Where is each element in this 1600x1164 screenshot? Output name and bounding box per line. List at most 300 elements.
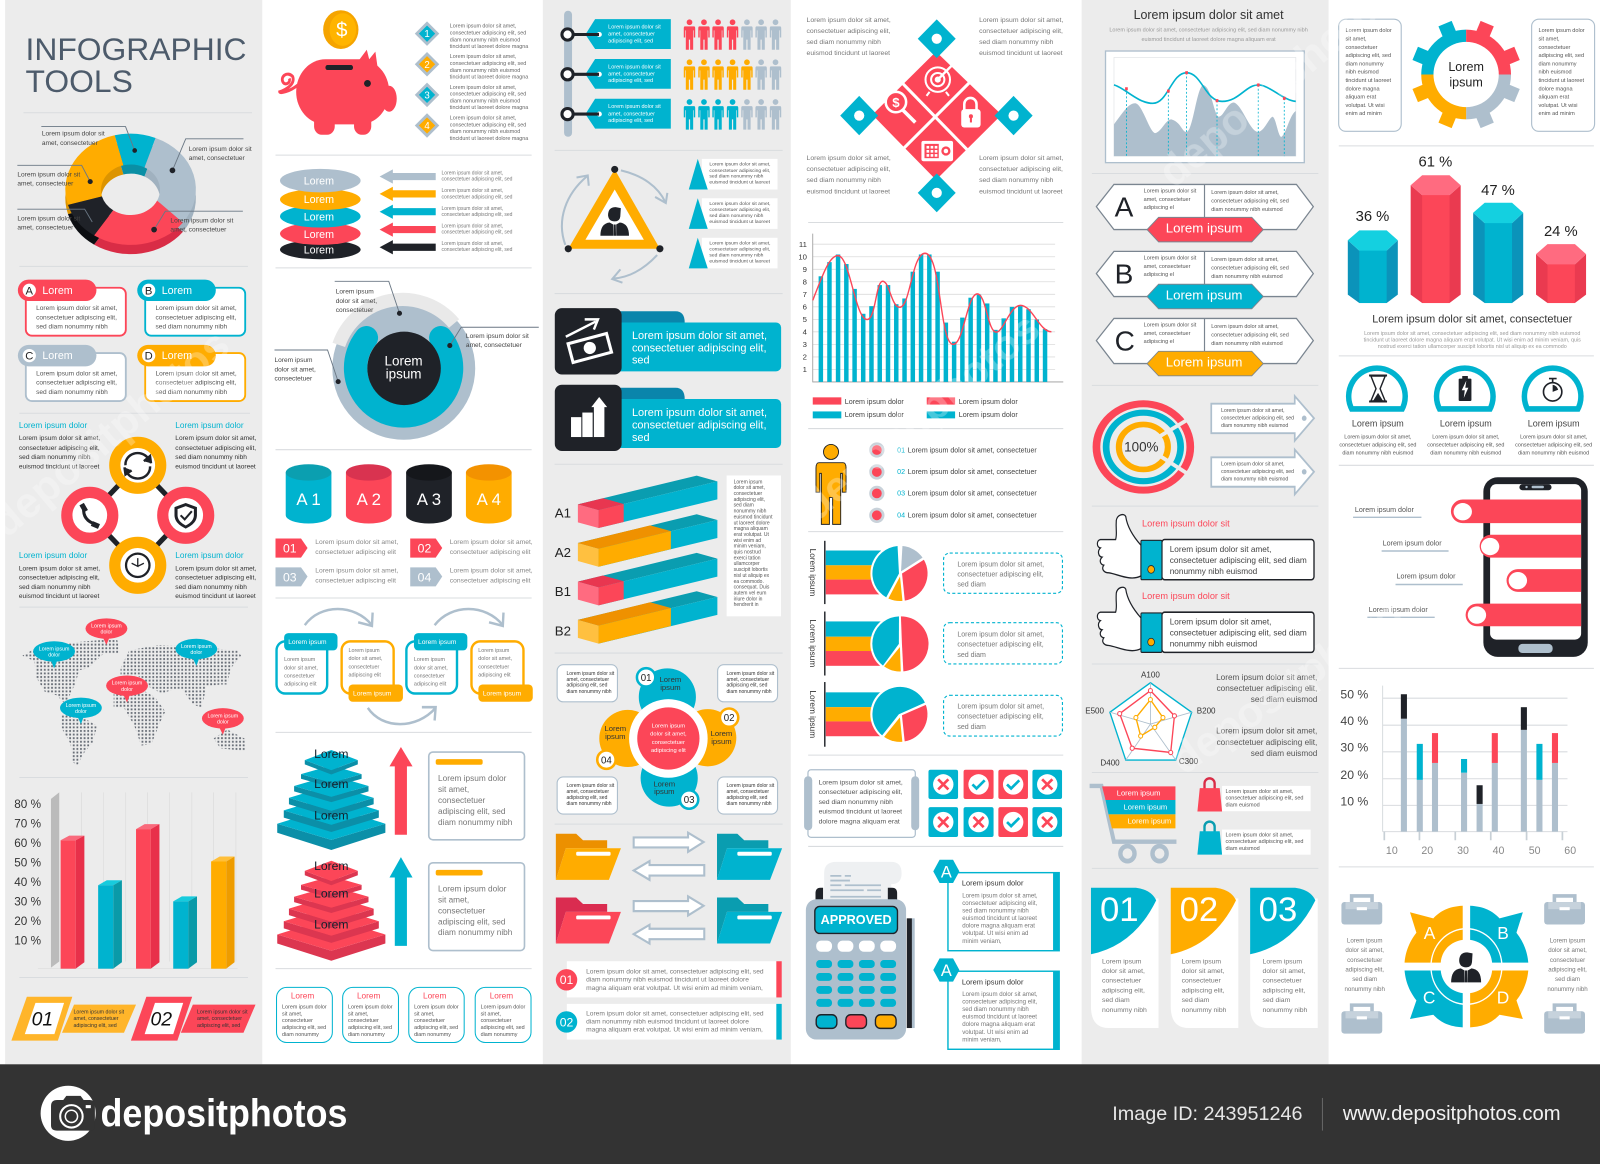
side text: sed diam xyxy=(734,503,754,509)
icon: clock xyxy=(126,554,149,577)
note card A top: euismod tincidunt ut laoreet xyxy=(962,915,1037,922)
pin 3: Lorem ipsum xyxy=(181,644,212,650)
radar chart: B200 xyxy=(1197,706,1216,715)
banner: growth xyxy=(555,385,781,451)
scroll note xyxy=(804,770,919,837)
card 02 xyxy=(1171,888,1238,1028)
list item 1: Lorem ipsum dolor sit amet, xyxy=(709,162,771,168)
tag 01: adipiscing elit, sed xyxy=(73,1023,117,1029)
note card A bottom: Lorem ipsum dolor sit amet, xyxy=(962,991,1038,998)
thumbs up note 1 xyxy=(1097,515,1314,580)
hexagonal column chart: Lorem ipsum dolor sit amet, consectetuer xyxy=(1372,313,1573,325)
gauge stopwatch xyxy=(1515,365,1592,457)
3D bar chart xyxy=(14,792,238,969)
stacked column chart: 10 xyxy=(1386,845,1398,857)
arrow note 2: Lorem ipsum dolor sit amet, xyxy=(1221,461,1285,467)
side text: wisi enim ad xyxy=(734,538,761,544)
item 4: 4 xyxy=(424,121,430,132)
donut chart: Lorem ipsum dolor sit xyxy=(42,131,105,138)
donut chart: Lorem ipsum dolor sit xyxy=(189,146,252,153)
stacked column chart: 50 % xyxy=(1340,688,1368,702)
callout B: consectetuer adipiscing elit, xyxy=(156,314,236,321)
bag note red: consectetuer adipiscing elit, sed xyxy=(1226,796,1303,802)
note strip 02: diam nonummy nibh euismod tincidunt ut laoreet dolore xyxy=(586,1018,749,1025)
pie row 2: Lorem ipsum xyxy=(808,620,817,667)
text blocks: euismod tincidunt ut laoreet xyxy=(19,463,99,470)
number cards xyxy=(1091,888,1318,1028)
item 1: Lorem ipsum dolor sit amet, xyxy=(450,24,517,30)
slider labels: Lorem ipsum dolor xyxy=(1369,606,1428,614)
bar and line chart: 11 xyxy=(799,240,807,249)
hexagon row A: consectetuer adipiscing elit, sed xyxy=(1211,198,1289,204)
note card A top: minim veniam, xyxy=(962,938,1002,945)
hexagon row B: B xyxy=(1115,258,1133,289)
3D bar chart: 30 % xyxy=(14,896,41,909)
donut chart: amet, consectetuer xyxy=(42,140,99,147)
note strip 01 xyxy=(556,961,782,997)
hexagonal column chart: tincidunt ut laoreet dolore magna aliquam erat volutpat. Ut wisi enim ad minim veniam, quis xyxy=(1364,337,1581,343)
note strip 01: diam nonummy nibh euismod tincidunt ut laoreet dolore xyxy=(586,977,749,984)
card 02: consectetuer xyxy=(1182,978,1221,985)
hexagon row B: Lorem ipsum dolor sit xyxy=(1144,255,1197,261)
slider 3 xyxy=(1507,569,1581,592)
gauge battery: Lorem ipsum dolor sit amet, xyxy=(1432,434,1500,440)
item 2: Lorem ipsum dolor sit amet, xyxy=(450,54,517,60)
gauge hourglass xyxy=(1339,365,1416,457)
arrow list: Lorem ipsum dolor sit amet, xyxy=(442,241,503,247)
slider labels: Lorem ipsum dolor xyxy=(1383,539,1442,547)
card 03: Lorem ipsum xyxy=(1263,958,1302,965)
concentric circle diagram: dolor sit amet, xyxy=(274,366,316,373)
stacked ellipses: Lorem xyxy=(304,211,334,223)
ABCD side text: Lorem ipsum xyxy=(1347,937,1382,944)
warning triangle cycle xyxy=(562,166,667,283)
tag 04: 04 xyxy=(418,571,431,585)
watermarks: depositphotos xyxy=(792,304,1049,530)
process flow: Lorem ipsum xyxy=(353,690,392,697)
arrow note 1: Lorem ipsum dolor sit amet, xyxy=(1221,408,1285,414)
text blocks: sed diam nonummy nibh xyxy=(19,454,91,461)
card 1: sit amet, xyxy=(282,1011,303,1017)
scroll note: dolore magna aliquam erat xyxy=(819,818,900,825)
text blocks: consectetuer adipiscing elit, xyxy=(19,445,100,452)
callout C: Lorem xyxy=(42,350,73,362)
card 02: Lorem ipsum xyxy=(1182,958,1221,965)
concentric circle diagram: dolor sit amet, xyxy=(336,298,377,305)
scroll note: sed diam nonummy nibh xyxy=(819,799,893,806)
note left: consectetuer xyxy=(1346,45,1378,51)
bar and line chart: 9 xyxy=(803,265,807,274)
corner text blocks: Lorem ipsum dolor sit amet, xyxy=(807,155,891,162)
callout D: D xyxy=(145,351,153,363)
bag note red: diam euismod xyxy=(1226,802,1260,808)
card 01: Lorem ipsum xyxy=(1102,958,1142,965)
flower note boxes: Lorem ipsum dolor sit xyxy=(727,783,775,789)
hexagon row C: consectetuer adipiscing elit, sed xyxy=(1211,332,1289,338)
arrow list: Lorem ipsum dolor sit amet, xyxy=(442,223,503,229)
hexagon row B xyxy=(1096,251,1313,309)
note right: enim ad minim xyxy=(1538,111,1575,117)
pin 1 xyxy=(86,618,127,645)
flower diagram: dolor sit amet, xyxy=(650,732,687,738)
bar and line chart: 8 xyxy=(803,277,807,286)
numbered list xyxy=(415,21,528,142)
hexagon row A: Lorem ipsum dolor sit amet, xyxy=(1211,190,1279,196)
people row teal xyxy=(684,99,781,130)
card 03: dolor sit amet, xyxy=(1263,968,1306,975)
isometric bars A1-B2: A2 xyxy=(555,545,571,560)
pie row 2 xyxy=(808,612,1062,676)
item 2 xyxy=(415,52,528,81)
ABCD circular diagram: A xyxy=(1424,923,1436,943)
pie row 3: Lorem ipsum dolor sit amet, xyxy=(957,704,1044,711)
people row red xyxy=(684,19,781,50)
tag row 2 xyxy=(562,59,671,89)
callout B: Lorem xyxy=(162,285,192,297)
note left: nibh euismod xyxy=(1346,70,1379,76)
note left: adipiscing elit, sed xyxy=(1346,53,1391,59)
arrow list: consectetuer adipiscing elit, sed xyxy=(442,212,513,218)
bag note red xyxy=(1197,778,1311,812)
check and cross tiles xyxy=(928,770,1062,837)
side text: iriure dolor in xyxy=(734,596,763,602)
shopping cart xyxy=(1090,786,1176,861)
flower diagram: ipsum xyxy=(711,737,732,746)
pin 2 xyxy=(33,641,75,668)
card 03 xyxy=(1250,888,1318,1028)
stacked column chart: 30 xyxy=(1457,845,1469,857)
tag row 3: amet, consectetuer xyxy=(608,111,655,117)
side text xyxy=(727,476,781,616)
side text: minim veniam, xyxy=(734,544,766,550)
flower note boxes: adipiscing elit, sed xyxy=(567,795,608,801)
icon: red folder xyxy=(556,897,621,944)
tag 02: amet, consectetuer xyxy=(197,1016,242,1022)
flower note boxes: adipiscing elit, sed xyxy=(567,683,608,689)
list item 2: Lorem ipsum dolor sit amet, xyxy=(709,201,771,207)
stacked ellipses: Lorem xyxy=(304,229,334,241)
3D bar chart: 70 % xyxy=(14,817,41,830)
pin 6: Lorem ipsum xyxy=(208,713,239,719)
note card A bottom: minim veniam, xyxy=(962,1036,1002,1043)
note card A top: A xyxy=(941,864,952,882)
text blocks: consectetuer adipiscing elit, xyxy=(19,575,100,582)
arrow note 1: diam nonummy nibh euismod xyxy=(1221,423,1288,429)
arrow note 1: consectetuer adipiscing elit, sed xyxy=(1221,415,1294,421)
note card A top: dolore magna aliquam erat xyxy=(962,923,1035,930)
list item 3: consectetuer adipiscing elit, xyxy=(709,247,770,253)
note strip 01: magna aliquam erat volutpat. Ut wisi enim ad minim veniam, xyxy=(586,985,763,992)
stacked column chart: 40 xyxy=(1493,845,1505,857)
item 3: 3 xyxy=(424,90,430,101)
callout C: consectetuer adipiscing elit, xyxy=(36,380,117,387)
flower diagram: 01 xyxy=(641,673,652,684)
cylinder A4: A 4 xyxy=(477,490,501,509)
tag 02: 02 xyxy=(418,542,431,556)
gauge stopwatch: consectetuer adipiscing elit, sed xyxy=(1515,443,1592,449)
stacked column chart: 60 xyxy=(1564,845,1576,857)
side text: magna aliquam xyxy=(734,526,768,532)
bar and line chart: 2 xyxy=(803,353,807,362)
card 3 xyxy=(409,987,464,1042)
note card A bottom: dolore magna aliquam erat xyxy=(962,1021,1035,1028)
teal pyramid: Lorem xyxy=(314,777,349,791)
stacked ellipses: Lorem xyxy=(304,245,334,257)
side text: ea commodo. xyxy=(734,579,764,585)
icon: teal folder 1 xyxy=(717,834,782,880)
bag notes xyxy=(1197,778,1311,855)
card 2: diam nonummy xyxy=(348,1032,385,1038)
diamond icon diagram xyxy=(840,19,1033,212)
ABCD side text: consectetuer xyxy=(1550,957,1585,964)
radar chart: C300 xyxy=(1179,757,1199,766)
corner text blocks: Lorem ipsum dolor sit amet, xyxy=(807,17,891,24)
stacked column chart: 10 % xyxy=(1340,794,1368,808)
note card A top: consectetuer adipiscing elit, xyxy=(962,900,1038,907)
arrow note 2: diam nonummy nibh euismod xyxy=(1221,477,1288,483)
card 4: Lorem xyxy=(490,991,513,1000)
side text: suscipit lobortis xyxy=(734,567,768,573)
list item 3: euismod tincidunt ut laoreet xyxy=(709,259,771,265)
card 2: adipiscing elit, sed xyxy=(348,1025,392,1031)
flower note boxes xyxy=(557,665,778,814)
gear with side notes xyxy=(1339,19,1595,131)
slider 1 xyxy=(1451,499,1581,523)
icon: pig xyxy=(280,50,397,135)
banner: money: Lorem ipsum dolor sit amet, xyxy=(632,330,767,342)
icon: shield xyxy=(174,503,197,529)
radar side text: Lorem ipsum dolor sit amet, xyxy=(1216,673,1317,682)
pie row 1: Lorem ipsum dolor sit amet, xyxy=(957,561,1044,568)
flower note boxes: amet, consectetuer xyxy=(727,677,769,683)
radar chart: E500 xyxy=(1085,707,1105,716)
icon: phone xyxy=(82,504,99,527)
callout B: Lorem ipsum dolor sit amet, xyxy=(156,305,237,312)
side text: euismod tincidunt xyxy=(734,514,773,520)
column 36% xyxy=(1348,230,1398,303)
text box 1: sit amet, xyxy=(438,785,469,794)
list item 3 xyxy=(689,238,778,268)
text blocks xyxy=(19,421,257,600)
teal pyramid: Lorem xyxy=(314,808,349,822)
hook tags with people xyxy=(562,11,781,137)
concentric circle diagram xyxy=(274,281,539,440)
hexagon row A: diam nonummy nibh euismod xyxy=(1211,207,1283,213)
panel: column 3 xyxy=(543,0,791,1064)
hexagonal column chart: nostrud exerci tation ullamcorper suscipit lobortis nisl ut aliquip ex ea commodo xyxy=(1378,344,1567,350)
process flow: adipiscing elit xyxy=(284,682,317,688)
scroll note: consectetuer adipiscing elit, xyxy=(819,789,903,796)
card 03: nonummy nibh xyxy=(1263,1007,1308,1014)
piggy bank with coin xyxy=(280,10,397,135)
note right: nibh euismod xyxy=(1538,70,1572,76)
triangle list xyxy=(689,159,778,268)
text blocks: Lorem ipsum dolor xyxy=(175,421,244,430)
tag 04: Lorem ipsum dolor sit amet, xyxy=(450,567,533,574)
process flow: dolor sit amet, xyxy=(348,656,383,662)
ABCD side text: nonummy nibh xyxy=(1344,986,1385,993)
pie row 1: sed diam xyxy=(957,581,986,588)
concentric circle diagram: consectetuer xyxy=(274,376,313,383)
donut chart: Lorem ipsum dolor sit xyxy=(17,172,80,179)
chart legend: Lorem ipsum dolor xyxy=(959,398,1018,406)
stacked ellipses: Lorem xyxy=(304,176,334,188)
red pyramid: Lorem xyxy=(314,859,349,873)
item 3: consectetuer adipiscing elit, sed xyxy=(450,92,526,98)
side text: erat volutpat. Ut xyxy=(734,532,769,538)
watermarks: depositphotos xyxy=(1162,575,1431,784)
arrow list: consectetuer adipiscing elit, sed xyxy=(442,247,513,253)
process flow: Lorem ipsum xyxy=(284,657,316,663)
arrow list: Lorem ipsum dolor sit amet, xyxy=(442,188,503,194)
banner: growth: sed xyxy=(632,432,650,444)
note card A top: sed diam nonummy nibh xyxy=(962,908,1029,915)
flower note boxes: adipiscing elit, sed xyxy=(727,683,768,689)
process flow: Lorem ipsum xyxy=(418,639,457,646)
pin 2: Lorem ipsum xyxy=(39,647,70,653)
tag row 2: adipiscing elit, sed xyxy=(608,78,653,84)
process flow: consectetuer xyxy=(414,674,445,680)
transfer arrows xyxy=(634,833,704,944)
folders and transfer arrows xyxy=(556,833,782,944)
note card A top: Lorem ipsum dolor xyxy=(962,879,1024,888)
arrow: red up xyxy=(389,747,413,835)
thumbs up note 2: nonummy nibh euismod xyxy=(1170,640,1258,649)
panel: column 5 xyxy=(1082,0,1329,1064)
card 01: nonummy nibh xyxy=(1102,1007,1147,1014)
text blocks: Lorem ipsum dolor xyxy=(19,421,87,430)
pin 4 xyxy=(106,676,148,703)
callout B: B xyxy=(145,285,152,297)
pin 4: dolor xyxy=(121,687,133,693)
hexagon row B: consectetuer adipiscing elit, sed xyxy=(1211,265,1289,271)
scroll note: Lorem ipsum dolor sit amet, xyxy=(819,779,903,786)
card 3: Lorem xyxy=(423,991,447,1000)
gear with side notes: ipsum xyxy=(1449,76,1483,90)
card 03: sed diam xyxy=(1263,997,1291,1004)
numbered tags 01-04 xyxy=(276,538,533,586)
list item 3: sed diam nonummy nibh xyxy=(709,252,764,258)
pin 4: Lorem ipsum xyxy=(112,681,143,687)
note right: volutpat. Ut wisi xyxy=(1538,103,1578,109)
banner: money: sed xyxy=(632,355,650,367)
side text: ullamcorper xyxy=(734,561,760,567)
item 4: Lorem ipsum dolor sit amet, xyxy=(450,115,517,121)
note left: aliquam erat xyxy=(1346,95,1377,101)
stacked ellipses xyxy=(280,169,361,259)
corner text blocks: euismod tincidunt ut laoreet xyxy=(807,188,890,195)
card 3: Lorem ipsum dolor xyxy=(414,1005,459,1011)
note right: tincidunt ut laoreet xyxy=(1538,78,1585,84)
tag 01: consectetuer adipiscing elit xyxy=(315,549,396,556)
corner text blocks: sed diam nonummy nibh xyxy=(979,39,1054,46)
3D bar chart: 20 % xyxy=(14,915,41,928)
item 3: Lorem ipsum dolor sit amet, xyxy=(450,85,517,91)
gear with side notes: Lorem xyxy=(1448,60,1484,74)
gauge hourglass: consectetuer adipiscing elit, sed xyxy=(1339,443,1416,449)
side text: autem vel eum xyxy=(734,590,766,596)
slider 2 xyxy=(1480,535,1581,558)
process flow: consectetuer xyxy=(348,664,380,670)
tag row 1: Lorem ipsum dolor sit xyxy=(608,25,661,31)
note right: aliquam erat xyxy=(1538,95,1570,101)
card 02: nonummy nibh xyxy=(1182,1007,1227,1014)
text blocks: sed diam nonummy nibh xyxy=(175,584,247,591)
tag row 3: adipiscing elit, sed xyxy=(608,118,653,124)
item 1 xyxy=(415,21,528,50)
pin 5 xyxy=(60,698,102,724)
gauge stopwatch: Lorem ipsum xyxy=(1528,419,1580,429)
bar A2 xyxy=(578,514,717,567)
flower note boxes: Lorem ipsum dolor sit xyxy=(567,783,615,789)
corner text blocks: Lorem ipsum dolor sit amet, xyxy=(979,17,1063,24)
footer bar xyxy=(0,1064,1600,1164)
donut chart: amet, consectetuer xyxy=(189,155,246,162)
ABCD side text: Lorem ipsum xyxy=(1550,937,1585,944)
hexagon row B: adipiscing el xyxy=(1144,272,1174,278)
process flow: consectetuer xyxy=(284,674,315,680)
card 2 xyxy=(343,987,398,1042)
card 4: consectetuer xyxy=(481,1018,512,1024)
3D bar chart: 60 % xyxy=(14,837,41,850)
concentric circle diagram: Lorem ipsum dolor sit xyxy=(466,333,529,340)
callout boxes A-D xyxy=(18,280,245,401)
callout A: Lorem ipsum dolor sit amet, xyxy=(36,305,117,312)
card 01: consectetuer xyxy=(1102,978,1142,985)
flower note boxes: Lorem ipsum dolor sit xyxy=(727,671,775,677)
list item 2: sed diam nonummy nibh xyxy=(709,213,764,219)
radar side text: Lorem ipsum dolor sit amet, xyxy=(1216,727,1317,736)
item 3 xyxy=(415,83,528,111)
note left: dolore magna xyxy=(1346,86,1381,92)
hexagon row C xyxy=(1096,318,1313,376)
card 03: 03 xyxy=(1259,891,1297,929)
corner text blocks: consectetuer adipiscing elit, xyxy=(979,166,1063,173)
ABCD side text: dolor sit amet, xyxy=(1345,947,1384,954)
ABCD side text: consectetuer xyxy=(1347,957,1382,964)
four rounded cards xyxy=(277,987,531,1042)
card 1: Lorem xyxy=(291,991,314,1000)
note left: tincidunt ut laoreet xyxy=(1346,78,1392,84)
text box 2: diam nonummy nibh xyxy=(438,928,513,937)
person with list xyxy=(816,442,1037,524)
3D bar chart: 80 % xyxy=(14,798,41,811)
card 2: Lorem ipsum dolor xyxy=(348,1005,393,1011)
text blocks: euismod tincidunt ut laoreet xyxy=(175,593,256,600)
gauge battery: Lorem ipsum xyxy=(1440,419,1492,429)
hexagon row A: Lorem ipsum dolor sit xyxy=(1144,189,1197,195)
thumbs up note 2: Lorem ipsum dolor sit xyxy=(1142,591,1230,601)
text blocks: sed diam nonummy nibh xyxy=(175,454,247,461)
note card A top: Lorem ipsum dolor sit amet, xyxy=(962,892,1038,899)
teal pyramid xyxy=(277,747,385,850)
radar chart xyxy=(1085,671,1216,767)
flower diagram: consectetuer xyxy=(652,740,685,746)
corner text blocks: consectetuer adipiscing elit, xyxy=(807,28,891,35)
hexagonal column chart: 47 % xyxy=(1481,183,1515,199)
card 3: sit amet, xyxy=(414,1011,435,1017)
hexagon row A: Lorem ipsum xyxy=(1166,221,1242,236)
side text: nisl ut aliquip ex xyxy=(734,573,770,579)
ABCD side text: adipiscing elit, xyxy=(1548,966,1587,973)
text box 1: consectetuer xyxy=(438,796,486,805)
hexagonal column chart: 61 % xyxy=(1419,154,1452,170)
logo: depositphotos xyxy=(101,1093,347,1136)
banner: growth: Lorem ipsum dolor sit amet, xyxy=(632,407,767,419)
pie row 3: Lorem ipsum xyxy=(808,690,817,738)
donut chart: Lorem ipsum dolor sit xyxy=(170,217,233,224)
tag row 3 xyxy=(562,99,671,129)
